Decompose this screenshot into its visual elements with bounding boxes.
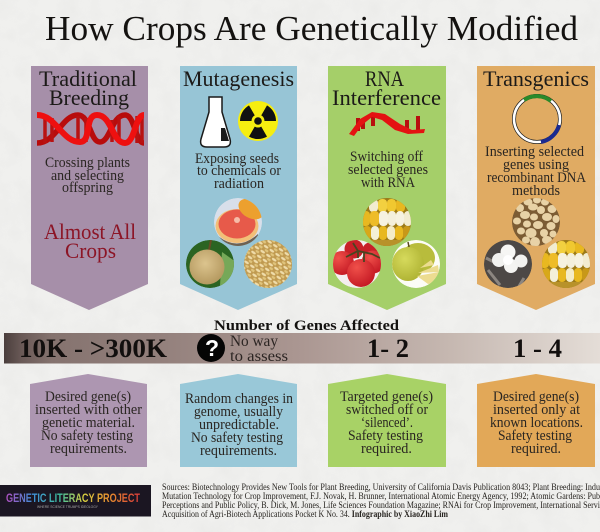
text: RNA interference description: with RNA <box>361 175 415 191</box>
sources text <box>162 482 600 520</box>
panel: transgenics <box>477 66 595 310</box>
value: mutagenesis: No way <box>230 333 278 350</box>
panel: RNA interference <box>328 66 446 310</box>
callout: almost all crops: Crops <box>65 238 116 263</box>
logo: genetic literacy project: WHERE SCIENCE TRUMPS IDEOLOGY <box>37 505 98 509</box>
panel: transgenics safety: Safety testing <box>498 428 572 444</box>
panel: RNA interference safety: Targeted gene(s) <box>340 389 433 405</box>
text: mutagenesis description: to chemicals or <box>197 163 281 179</box>
logo: genetic literacy project <box>0 485 151 516</box>
panel: mutagenesis safety: unpredictable. <box>199 417 279 433</box>
text: transgenics description: recombinant DNA <box>487 170 586 186</box>
panel: mutagenesis safety: Random changes in <box>185 391 293 407</box>
panel: mutagenesis safety: No safety testing <box>191 430 283 446</box>
photo: soybeans <box>512 196 560 247</box>
heading: traditional breeding <box>39 66 137 110</box>
icon: question mark: ? <box>205 335 219 361</box>
panel: mutagenesis safety <box>180 374 297 467</box>
photo: grapefruit <box>214 198 262 246</box>
heading: mutagenesis: Mutagenesis <box>183 66 294 91</box>
text: traditional breeding description <box>45 155 130 196</box>
value: transgenics: 1 - 4 <box>513 334 562 363</box>
text: transgenics description: genes using <box>503 157 569 173</box>
value: mutagenesis <box>230 333 288 365</box>
panel: RNA interference safety: required. <box>361 441 412 457</box>
heading: traditional breeding: Breeding <box>49 85 129 110</box>
text: traditional breeding description: offspring <box>62 180 113 196</box>
sources text: Acquisition of Agri-Biotech Applications Pocket K No. 34. Infographic by XiaoZhi Lim <box>162 509 448 520</box>
panel: RNA interference safety <box>328 374 446 467</box>
logo: genetic literacy project: GENETIC LITERACY PROJECT <box>6 493 140 505</box>
panel: traditional breeding safety: No safety testing <box>41 428 133 444</box>
panel: mutagenesis safety: genome, usually <box>194 404 283 420</box>
icon: radiation symbol <box>238 101 278 141</box>
panel: traditional breeding safety: Desired gene(s) <box>45 389 131 405</box>
value: traditional breeding: 10K - >300K <box>19 334 168 363</box>
panel: traditional breeding safety: genetic material. <box>42 415 135 431</box>
text: mutagenesis description: Exposing seeds <box>195 151 279 167</box>
icon: question mark <box>197 334 225 362</box>
text: traditional breeding description: and selecting <box>51 168 124 184</box>
heading: number of genes affected: Number of Genes Affected <box>214 318 400 334</box>
text: mutagenesis description: radiation <box>214 176 264 192</box>
callout: almost all crops <box>44 219 136 263</box>
value: RNA interference: 1- 2 <box>367 334 409 363</box>
panel: traditional breeding safety: requirements. <box>50 441 127 457</box>
panel: traditional breeding safety: inserted with other <box>35 402 142 418</box>
photo: pear <box>186 240 236 288</box>
photo: apple <box>392 240 440 288</box>
value: mutagenesis: to assess <box>230 348 288 365</box>
heading: RNA interference: RNA <box>365 66 404 91</box>
text: traditional breeding description: Crossing plants <box>45 155 130 171</box>
icon: flask <box>201 97 230 147</box>
icon: red DNA helix <box>37 115 144 143</box>
photo: cotton <box>484 240 532 288</box>
panel: RNA interference safety: ‘silenced’. <box>361 415 413 431</box>
text: transgenics description: methods <box>512 183 560 199</box>
heading: transgenics: Transgenics <box>483 66 589 91</box>
heading: RNA interference <box>332 66 441 110</box>
panel: transgenics safety: required. <box>511 441 561 457</box>
photo: corn <box>361 198 412 247</box>
gradient bar: genes affected <box>4 333 600 365</box>
text: transgenics description <box>485 144 586 199</box>
panel: mutagenesis <box>180 66 297 310</box>
heading: traditional breeding: Traditional <box>39 66 137 91</box>
callout: almost all crops: Almost All <box>44 219 136 244</box>
icon: plasmid ring <box>514 96 560 142</box>
panel: transgenics safety: inserted only at <box>493 402 581 418</box>
icon: RNA ribbon <box>349 112 425 136</box>
panel: RNA interference safety: switched off or <box>346 402 428 418</box>
title: How Crops Are Genetically Modified <box>45 9 578 48</box>
text: RNA interference description <box>348 149 428 191</box>
text: transgenics description: Inserting selected <box>485 144 584 160</box>
panel: transgenics safety <box>477 374 595 467</box>
panel: traditional breeding <box>31 66 148 310</box>
photo: tomatoes <box>333 240 381 288</box>
panel: RNA interference safety: Safety testing <box>348 428 423 444</box>
text: RNA interference description: Switching off <box>350 149 423 165</box>
heading: RNA interference: Interference <box>332 85 441 110</box>
photo: corn <box>540 240 591 289</box>
photo: grain <box>244 240 292 288</box>
panel: traditional breeding safety <box>30 374 147 467</box>
panel: transgenics safety: Desired gene(s) <box>493 389 579 405</box>
text: mutagenesis description <box>195 151 281 192</box>
text: RNA interference description: selected genes <box>348 162 428 178</box>
panel: transgenics safety: known locations. <box>490 415 583 431</box>
panel: mutagenesis safety: requirements. <box>200 443 277 459</box>
